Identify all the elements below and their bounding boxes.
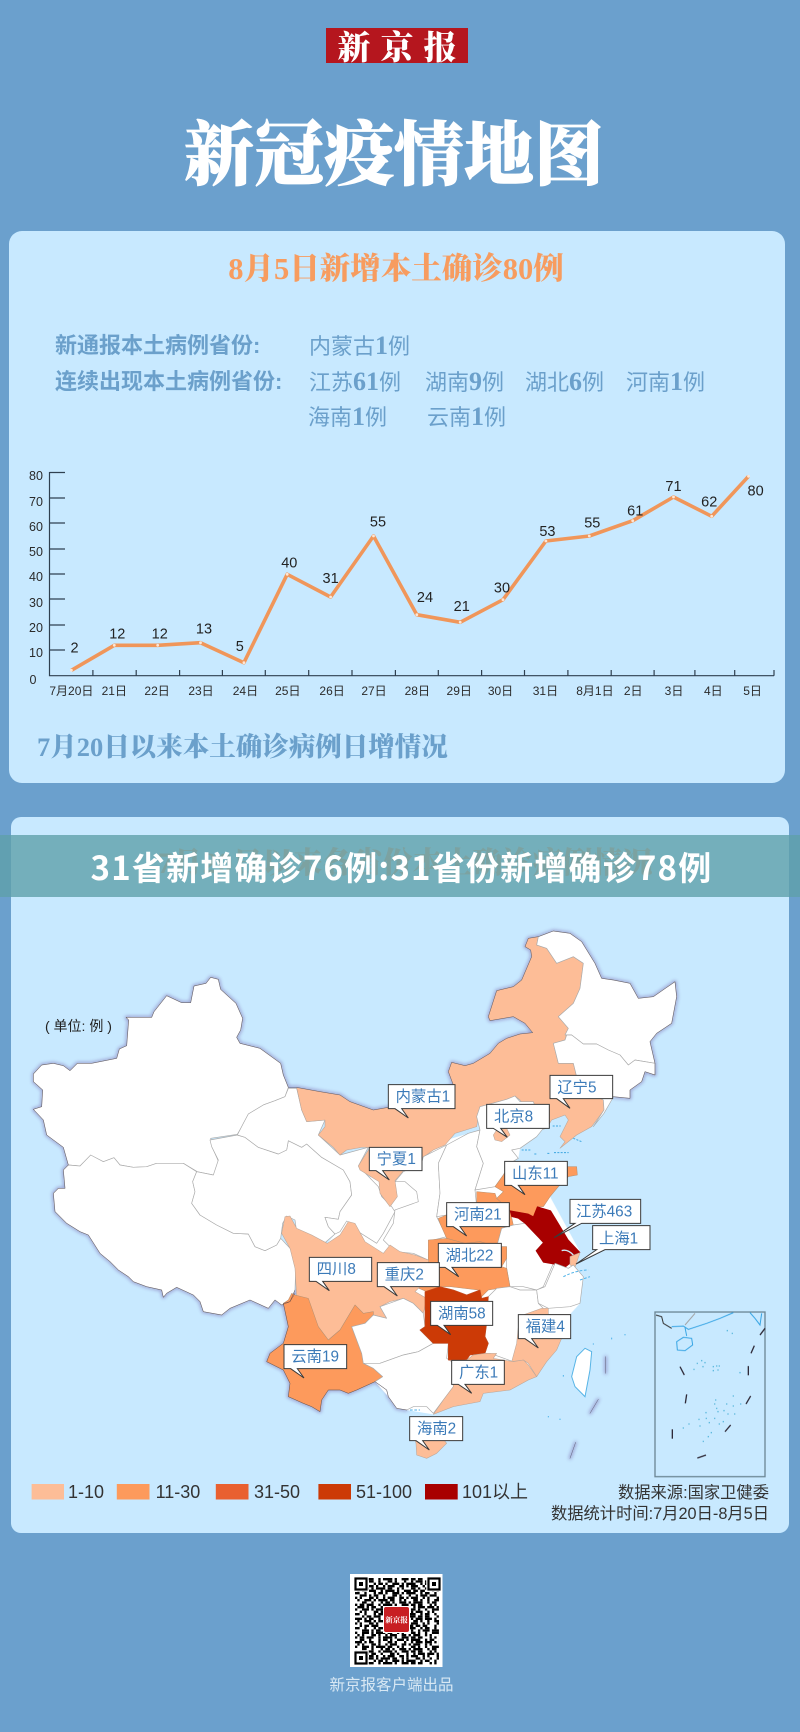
text block: continuing provinces line 1: 江苏61例 (309, 367, 401, 396)
data labels: 55 (584, 515, 600, 531)
x axis labels: 4日 (704, 684, 723, 698)
Shandong (495, 1162, 577, 1217)
data labels: 31 (323, 571, 339, 587)
logo: 新京报 masthead (326, 28, 468, 63)
text block: continuing provinces line 1 (55, 367, 705, 396)
provinces: north east (297, 931, 677, 1167)
data labels: 61 (627, 504, 643, 520)
callout: 北京8 (487, 1104, 549, 1137)
panel: map (11, 817, 789, 1533)
x axis labels: 28日 (405, 684, 430, 698)
chart caption: 7月20日以来本土确诊病例日增情况 (37, 732, 448, 762)
legend: 101以上 (462, 1482, 528, 1502)
data labels (70, 479, 764, 657)
Zhejiang (537, 1263, 583, 1308)
Inner Mongolia and Liaoning (297, 937, 604, 1167)
provinces: north and central (358, 1096, 580, 1298)
callout: 湖北22: 湖北22 (446, 1247, 493, 1264)
Shanghai (570, 1253, 580, 1267)
callout: 宁夏1 (369, 1147, 422, 1180)
data source note (551, 1484, 769, 1523)
data labels: 2 (70, 641, 79, 657)
unit note: ( 单位: 例 ) (45, 1018, 112, 1034)
callout: 河南21: 河南21 (454, 1207, 502, 1224)
data points (70, 475, 750, 672)
y axis labels: 70 (29, 495, 43, 509)
Anhui (497, 1223, 553, 1290)
callout: 云南19: 云南19 (291, 1349, 339, 1366)
y axis labels: 20 (29, 621, 43, 635)
data labels: 62 (701, 494, 717, 510)
data labels: 24 (417, 590, 433, 606)
chart axes (50, 472, 774, 676)
y axis labels: 30 (29, 596, 43, 610)
x axis labels: 23日 (188, 684, 214, 698)
callout: 宁夏1: 宁夏1 (377, 1151, 416, 1168)
callout: 湖南58 (431, 1301, 493, 1335)
data labels: 13 (196, 621, 212, 637)
Guangdong (433, 1353, 537, 1414)
text block: continuing provinces line 1: 连续出现本土病例省份: (55, 369, 282, 394)
Beijing (493, 1128, 510, 1142)
callout: 湖北22 (438, 1243, 501, 1277)
text block: newly reported provinces: 新通报本土病例省份: (55, 333, 260, 358)
provinces: west (33, 977, 288, 1175)
y axis labels: 60 (29, 520, 43, 534)
title: 新冠疫情地图 (184, 99, 604, 200)
data labels: 40 (281, 555, 297, 571)
callout: 四川8 (309, 1257, 372, 1291)
callout: 福建4 (518, 1315, 571, 1348)
legend (32, 1482, 528, 1502)
Ningxia (358, 1148, 403, 1207)
Henan (438, 1192, 513, 1247)
callout: 海南2: 海南2 (417, 1421, 456, 1438)
callout: 湖南58: 湖南58 (438, 1305, 486, 1322)
callout: 重庆2 (377, 1263, 439, 1296)
callout: 江苏463: 江苏463 (576, 1203, 632, 1220)
Bohai islands (522, 1126, 582, 1154)
callout: 辽宁5 (550, 1075, 613, 1108)
x axis labels: 5日 (743, 684, 762, 698)
data source note: 数据来源:国家卫健委 (618, 1484, 769, 1502)
Fujian (512, 1308, 570, 1377)
Hubei (415, 1238, 510, 1298)
Yunnan (267, 1293, 383, 1412)
x axis labels: 29日 (447, 684, 472, 698)
y axis labels: 40 (29, 570, 43, 584)
y axis labels: 50 (29, 545, 43, 559)
border glow (33, 931, 677, 1458)
x axis labels: 3日 (665, 684, 683, 698)
callout: 福建4: 福建4 (526, 1319, 565, 1336)
legend: 51-100 (356, 1482, 412, 1502)
x axis labels: 27日 (361, 684, 387, 698)
Yangtze mouth (562, 1250, 573, 1255)
QR code (350, 1574, 442, 1667)
callout: 河南21 (447, 1203, 509, 1236)
heading: 8月5日新增本土确诊80例: 8月5日新增本土确诊80例 (228, 252, 564, 286)
data line (71, 476, 748, 670)
Jiangsu (510, 1207, 580, 1267)
text block: continuing provinces line 1: 河南1例 (626, 367, 705, 396)
Taiwan (572, 1348, 592, 1397)
panel: daily new cases (9, 231, 785, 783)
text block: continuing provinces line 2 (308, 402, 506, 431)
provinces: west central (53, 1088, 395, 1315)
provinces: south (267, 1216, 625, 1458)
callout: 四川8: 四川8 (317, 1261, 356, 1278)
text block: newly reported provinces: 内蒙古1例 (309, 331, 410, 360)
Hunan (420, 1287, 488, 1360)
callouts (284, 1075, 650, 1378)
y axis labels: 10 (29, 646, 43, 660)
callout: 重庆2: 重庆2 (385, 1266, 424, 1283)
callout: 内蒙古1: 内蒙古1 (396, 1089, 450, 1106)
Gansu (237, 1088, 395, 1243)
callout: 上海1: 上海1 (599, 1231, 638, 1248)
Tibet (53, 1155, 296, 1315)
x axis labels: 7月20日 (49, 684, 93, 698)
Guangxi (363, 1343, 453, 1413)
x axis labels: 21日 (102, 684, 127, 698)
Shaanxi (383, 1145, 447, 1260)
data labels: 21 (454, 599, 470, 615)
data labels: 5 (236, 639, 244, 655)
text block: newly reported provinces (55, 331, 410, 360)
QR code: 新京报 (385, 1614, 408, 1626)
callout: 广东1: 广东1 (459, 1364, 498, 1381)
map panel heading (behind banner): 7月20日以来各省份本土确诊病例情况 (158, 847, 652, 880)
Heilongjiang (537, 931, 677, 1065)
data labels: 71 (665, 479, 682, 495)
legend: 31-50 (254, 1482, 300, 1502)
y axis labels: 0 (30, 673, 37, 687)
data labels: 30 (494, 580, 510, 596)
footer credit: 新京报客户端出品 (329, 1677, 454, 1694)
y axis labels (29, 469, 43, 687)
Hainan (413, 1435, 447, 1458)
data labels: 55 (370, 515, 386, 531)
x axis labels: 25日 (275, 684, 300, 698)
callout: 上海1 (576, 1226, 650, 1264)
legend: 11-30 (156, 1482, 200, 1502)
x axis labels: 30日 (488, 684, 513, 698)
data source note: 数据统计时间:7月20日-8月5日 (551, 1505, 769, 1523)
text block: continuing provinces line 2: 云南1例 (427, 402, 506, 431)
data labels: 12 (152, 626, 168, 642)
callout: 辽宁5: 辽宁5 (557, 1079, 597, 1096)
x axis labels: 22日 (144, 684, 170, 698)
text block: continuing provinces line 1: 湖南9例 (425, 367, 504, 396)
text block: continuing provinces line 1: 湖北6例 (525, 367, 604, 396)
Sichuan and Chongqing (282, 1216, 428, 1340)
Jilin (553, 1035, 655, 1127)
data labels: 53 (539, 524, 555, 540)
Shanxi (437, 1130, 483, 1217)
callout: 山东11: 山东11 (512, 1165, 559, 1182)
callout: 山东11 (505, 1161, 567, 1195)
Hebei (475, 1096, 543, 1190)
x axis labels: 26日 (319, 684, 345, 698)
logo: 新京报 masthead: 新京报 (338, 22, 466, 69)
callout: 北京8: 北京8 (494, 1108, 533, 1125)
callout: 内蒙古1 (388, 1085, 455, 1118)
Qinghai (192, 1135, 352, 1251)
Jiangxi (485, 1287, 543, 1362)
x axis labels: 2日 (624, 684, 643, 698)
banner overlay (0, 835, 800, 897)
banner overlay: 31省新增确诊76例:31省份新增确诊78例 (91, 842, 712, 890)
data labels: 12 (109, 626, 125, 642)
data labels: 80 (748, 483, 764, 499)
Xinjiang (33, 977, 288, 1175)
land base: central and eastern China (313, 1130, 583, 1414)
x axis labels: 24日 (233, 684, 258, 698)
legend: 1-10 (68, 1482, 104, 1502)
border lines (33, 931, 677, 1458)
callout: 云南19 (284, 1345, 347, 1378)
x axis labels: 31日 (533, 684, 558, 698)
y axis labels: 80 (29, 469, 43, 483)
text block: continuing provinces line 2: 海南1例 (308, 402, 387, 431)
x axis labels (49, 684, 762, 698)
Guizhou (352, 1298, 433, 1363)
x axis labels: 8月1日 (576, 684, 614, 698)
callout: 江苏463 (554, 1199, 641, 1238)
inset: South China Sea (655, 1312, 765, 1477)
coastal islands (410, 1270, 625, 1420)
